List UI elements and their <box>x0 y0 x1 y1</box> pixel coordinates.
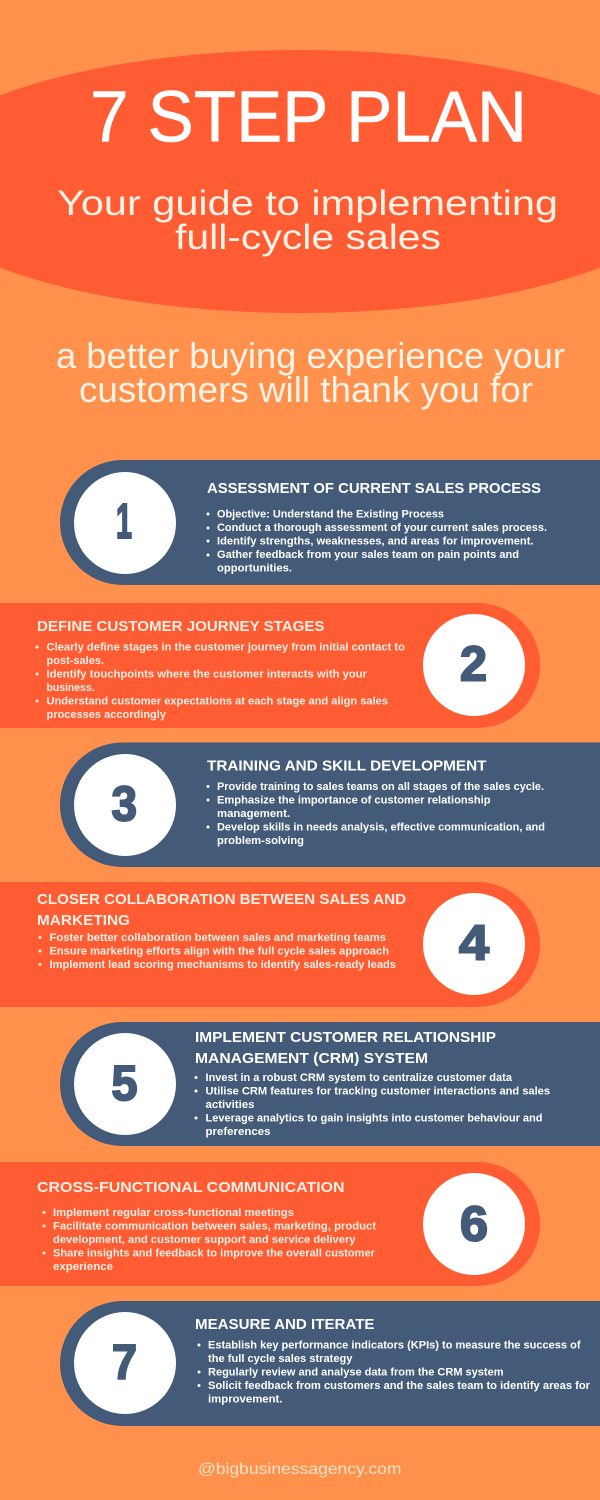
bullet list: step 7: the full cycle sales strategy <box>208 1353 353 1365</box>
bullet list: step 1: Objective: Understand the Existing Process <box>217 508 444 520</box>
title: 7 STEP PLAN <box>90 78 527 158</box>
number badge 1 <box>74 472 176 574</box>
bullet list: step 1: Gather feedback from your sales team on pain points and <box>217 549 519 561</box>
bullet list: step 6: development, and customer support and service delivery <box>53 1234 356 1246</box>
heading: step 3: TRAINING AND SKILL DEVELOPMENT <box>207 758 486 774</box>
heading: step 4: MARKETING <box>37 912 130 929</box>
panel: step 7 <box>60 1301 600 1426</box>
bullet list: step 7: Establish key performance indicators (KPIs) to measure the success of <box>208 1340 581 1352</box>
bullet list: step 1 <box>206 508 547 574</box>
bullet list: step 7: Solicit feedback from customers and the sales team to identify areas for <box>208 1380 590 1392</box>
bullet list: step 3: problem-solving <box>217 835 304 847</box>
number badge 2: 2 <box>460 638 487 692</box>
number badge 5 <box>74 1033 176 1135</box>
number badge 2 <box>423 614 525 716</box>
panel: step 1 <box>60 460 600 585</box>
panel: step 2 <box>0 603 540 728</box>
bullet list: step 1: Identify strengths, weaknesses, and areas for improvement. <box>217 536 534 548</box>
bullet list: step 7: improvement. <box>208 1394 283 1406</box>
heading: step 5 <box>195 1029 496 1067</box>
bullet list: step 3 <box>206 781 545 847</box>
bullet list: step 6: Implement regular cross-functional meetings <box>53 1207 294 1219</box>
heading: step 5: MANAGEMENT (CRM) SYSTEM <box>195 1050 428 1067</box>
bullet list: step 7: Regularly review and analyse data from the CRM system <box>208 1366 504 1378</box>
heading: step 2: DEFINE CUSTOMER JOURNEY STAGES <box>37 618 324 635</box>
subtitle <box>57 184 558 257</box>
bullet list: step 3: Develop skills in needs analysis, effective communication, and <box>217 822 545 834</box>
number badge 7 <box>74 1312 176 1414</box>
bullet list: step 6 <box>42 1207 376 1273</box>
bullet list: step 2: Understand customer expectations at each stage and align sales <box>46 696 388 708</box>
bullet list: step 1: opportunities. <box>217 562 292 574</box>
bullet list: step 2: processes accordingly <box>46 709 166 721</box>
bullet list: step 5: preferences <box>206 1126 271 1138</box>
bullet list: step 5: activities <box>206 1099 255 1111</box>
bullet list: step 2: post-sales. <box>46 655 104 667</box>
bullet list: step 6: Share insights and feedback to improve the overall customer <box>53 1248 375 1260</box>
bullet list: step 5: Utilise CRM features for tracking customer interactions and sales <box>206 1086 550 1098</box>
number badge 6 <box>423 1173 525 1275</box>
number badge 1: 1 <box>116 495 132 549</box>
tagline: customers will thank you for <box>79 369 533 410</box>
heading: step 7: MEASURE AND ITERATE <box>195 1316 374 1333</box>
bullet list: step 3: Provide training to sales teams on all stages of the sales cycle. <box>217 781 544 793</box>
number badge 7: 7 <box>112 1336 137 1390</box>
bullet list: step 7 <box>198 1340 590 1406</box>
heading: step 6: CROSS-FUNCTIONAL COMMUNICATION <box>37 1179 345 1196</box>
panel: step 5 <box>60 1022 600 1146</box>
bullet list: step 2 <box>36 642 406 721</box>
panel: step 3 <box>60 742 600 867</box>
number badge 4 <box>423 893 525 995</box>
bullet list: step 6: experience <box>53 1261 113 1273</box>
number badge 6: 6 <box>460 1198 488 1252</box>
bullet list: step 2: business. <box>46 682 95 694</box>
header ellipse <box>0 50 600 313</box>
heading: step 5: IMPLEMENT CUSTOMER RELATIONSHIP <box>195 1029 496 1046</box>
bullet list: step 4: Foster better collaboration between sales and marketing teams <box>50 932 386 944</box>
subtitle: Your guide to implementing <box>57 184 558 223</box>
subtitle: full-cycle sales <box>175 218 441 257</box>
bullet list: step 5: Leverage analytics to gain insights into customer behaviour and <box>206 1112 542 1124</box>
tagline: a better buying experience your <box>56 335 565 376</box>
bullet list: step 1: Conduct a thorough assessment of your current sales process. <box>217 522 547 534</box>
bullet list: step 5: Invest in a robust CRM system to centralize customer data <box>206 1072 512 1084</box>
heading: step 4 <box>37 891 406 929</box>
bullet list: step 2: Identify touchpoints where the customer interacts with your <box>46 668 367 680</box>
panel: step 6 <box>0 1162 540 1286</box>
number badge 3: 3 <box>112 778 137 832</box>
bullet list: step 6: Facilitate communication between sales, marketing, product <box>53 1220 376 1232</box>
panel: step 4 <box>0 882 540 1007</box>
bullet list: step 4: Implement lead scoring mechanisms to identify sales-ready leads <box>50 959 396 971</box>
heading: step 1: ASSESSMENT OF CURRENT SALES PROCESS <box>207 480 541 497</box>
bullet list: step 4: Ensure marketing efforts align with the full cycle sales approach <box>50 946 389 958</box>
number badge 4: 4 <box>459 916 489 970</box>
footer handle: @bigbusinessagency.com <box>198 1461 402 1478</box>
bullet list: step 5 <box>194 1072 550 1138</box>
tagline <box>56 335 565 410</box>
bullet list: step 3: management. <box>217 808 290 820</box>
bullet list: step 4 <box>38 932 396 971</box>
bullet list: step 2: Clearly define stages in the customer journey from initial contact to <box>46 642 406 654</box>
number badge 3 <box>74 754 176 856</box>
heading: step 4: CLOSER COLLABORATION BETWEEN SALES AND <box>37 891 406 908</box>
bullet list: step 3: Emphasize the importance of customer relationship <box>217 794 491 806</box>
number badge 5: 5 <box>112 1057 138 1111</box>
